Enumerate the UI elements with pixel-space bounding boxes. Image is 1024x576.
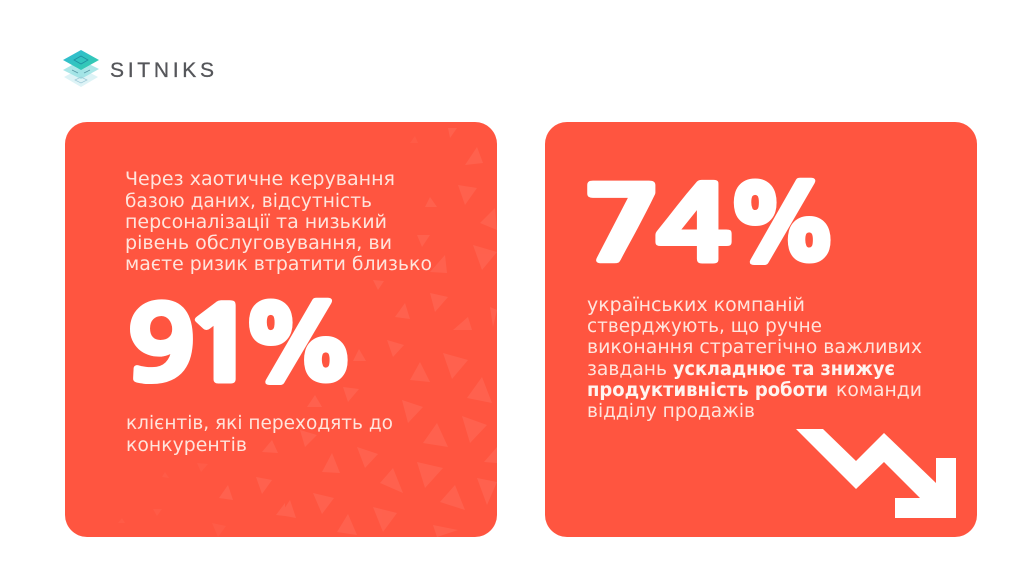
statistic: 74%: 4 [655,174,732,276]
statistic: 91% [126,293,356,397]
text block: companies: українських компаній [587,295,805,316]
statistic: 91%: 9 [126,293,196,396]
text block: companies [587,295,922,422]
statistic: 74%: 7 [582,175,662,277]
text block: companies: продуктивність роботи [587,380,828,401]
decorative triangle pattern [219,128,497,537]
text block: clients [126,413,393,456]
statistic: 74% [582,173,839,277]
logo wordmark: SITNIKS [110,59,214,82]
panel: right card [545,122,977,537]
text block: companies: команди [836,380,922,401]
text block: intro: рівень обслуговування, ви [125,233,392,254]
panel: left card [65,122,497,537]
statistic: 91%: % [239,294,356,397]
text block: companies: завдань [587,359,667,380]
text block: companies: відділу продажів [587,401,755,422]
text block: companies: ускладнює та знижує [673,359,895,380]
text block: intro: базою даних, відсутність [125,191,372,212]
text block: clients: клієнтів, які переходять до [126,413,393,434]
text block: intro: Через хаотичне керування [125,169,395,190]
text block: companies: виконання стратегічно важливих [587,337,922,358]
text block: intro: маєте ризик втратити близько [125,254,432,275]
text block: companies: стверджують, що ручне [587,316,822,337]
text block: intro: персоналізації та низький [125,212,387,233]
icon: stacked layers [63,50,99,87]
statistic: 74%: % [724,173,839,276]
icon: downward trend arrow [796,429,956,518]
logo: Sitniks [63,50,214,87]
text block: intro [125,169,432,275]
text block: clients: конкурентів [126,435,247,456]
statistic: 91%: 1 [184,294,260,396]
